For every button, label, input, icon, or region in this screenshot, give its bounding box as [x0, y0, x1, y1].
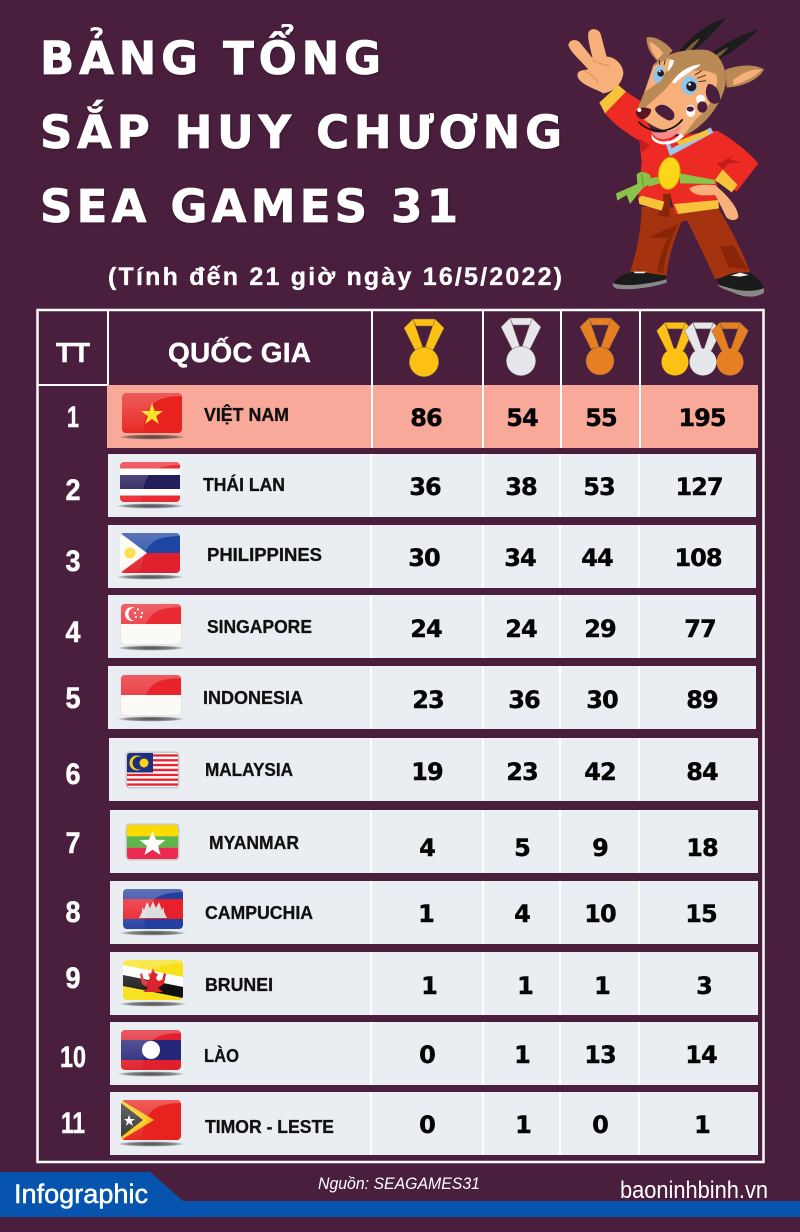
row 7: Myanmar: MYANMAR [209, 832, 299, 853]
row 1: Việt Nam: VIỆT NAM [204, 404, 289, 425]
flag: Brunei [119, 960, 187, 1007]
title: SEA GAMES 31 [40, 180, 458, 233]
flag: Myanmar [126, 824, 180, 860]
flag: Thailand [116, 462, 184, 509]
title: SẮP HUY CHƯƠNG [40, 101, 562, 159]
row 10: Lào: 10 [60, 1041, 86, 1074]
row 8: Campuchia: 15 [685, 900, 717, 928]
row 6: Malaysia [66, 738, 758, 801]
row 6: Malaysia: 42 [584, 758, 616, 786]
row 6: Malaysia: 23 [506, 758, 538, 786]
row 9: Brunei [66, 952, 758, 1015]
title: BẢNG TỔNG [40, 25, 381, 85]
row 5: Indonesia: 23 [412, 686, 444, 714]
row 7: Myanmar: 5 [514, 834, 530, 862]
icon: all medals [657, 322, 748, 376]
row 10: Lào [60, 1022, 758, 1085]
row 2: Thái Lan: 36 [409, 473, 441, 501]
icon: bronze medal [580, 318, 620, 375]
row 4: Singapore: 4 [66, 616, 81, 649]
row 3: Philippines: 34 [504, 544, 536, 572]
row 1: Việt Nam: 54 [506, 404, 538, 432]
row 3: Philippines: 44 [581, 544, 613, 572]
row 2: Thái Lan: THÁI LAN [203, 474, 285, 495]
row 3: Philippines [66, 525, 756, 588]
icon: gold medal [404, 319, 444, 377]
row 2: Thái Lan: 127 [675, 473, 723, 501]
footer banner [0, 1172, 800, 1217]
row 9: Brunei: 3 [696, 972, 712, 1000]
subtitle: date note: (Tính đến 21 giờ ngày 16/5/2022) [108, 263, 562, 291]
row 3: Philippines: 3 [66, 545, 80, 578]
row 8: Campuchia: 8 [66, 896, 80, 929]
row 11: Timor-Leste: 1 [515, 1111, 531, 1139]
row 11: Timor-Leste [61, 1092, 758, 1155]
row 8: Campuchia: 1 [418, 900, 434, 928]
website: baoninhbinh.vn [620, 1177, 768, 1204]
row 6: Malaysia: 19 [411, 758, 443, 786]
flag: Indonesia [117, 674, 185, 722]
footer label: Infographic: Infographic [14, 1179, 148, 1209]
flag: Philippines [116, 533, 184, 580]
row 5: Indonesia: 30 [586, 686, 618, 714]
row 3: Philippines: PHILIPPINES [207, 544, 322, 565]
row 1: Việt Nam: 86 [410, 404, 442, 432]
icon: silver medal [501, 318, 541, 376]
row 1: Việt Nam [67, 385, 758, 448]
row 5: Indonesia: 36 [508, 686, 540, 714]
row 7: Myanmar: 7 [66, 827, 80, 860]
row 5: Indonesia [66, 666, 756, 729]
row 6: Malaysia: 6 [66, 758, 80, 791]
row 4: Singapore: 24 [505, 615, 537, 643]
row 9: Brunei: 9 [66, 962, 80, 995]
row 5: Indonesia: INDONESIA [203, 687, 303, 708]
row 4: Singapore: 24 [410, 615, 442, 643]
row 10: Lào: LÀO [204, 1045, 239, 1066]
row 2: Thái Lan: 38 [505, 473, 537, 501]
header: country: QUỐC GIA [168, 336, 311, 368]
row 7: Myanmar: 9 [592, 834, 608, 862]
row 7: Myanmar [66, 810, 758, 873]
row 3: Philippines: 108 [674, 544, 722, 572]
row 8: Campuchia: 4 [514, 900, 530, 928]
row 11: Timor-Leste: 11 [61, 1107, 85, 1140]
row 10: Lào: 13 [584, 1041, 616, 1069]
row 11: Timor-Leste: 0 [419, 1111, 435, 1139]
flag: Laos [117, 1030, 185, 1077]
row 11: Timor-Leste: 0 [592, 1111, 608, 1139]
flag: Vietnam [118, 393, 186, 440]
row 3: Philippines: 30 [408, 544, 440, 572]
row 8: Campuchia: 10 [584, 900, 616, 928]
flag: Malaysia [126, 752, 180, 788]
row 1: Việt Nam: 195 [678, 404, 726, 432]
row 4: Singapore [66, 595, 756, 658]
row 7: Myanmar: 4 [419, 834, 435, 862]
row 4: Singapore: 29 [584, 615, 616, 643]
row 1: Việt Nam: 1 [67, 401, 79, 434]
row 10: Lào: 0 [419, 1041, 435, 1069]
flag: Singapore [117, 604, 185, 651]
flag: Timor-Leste [117, 1100, 185, 1147]
row 11: Timor-Leste: TIMOR - LESTE [205, 1116, 334, 1137]
row 4: Singapore: 77 [684, 615, 716, 643]
row 10: Lào: 14 [685, 1041, 717, 1069]
row 9: Brunei: 1 [421, 972, 437, 1000]
row 8: Campuchia: CAMPUCHIA [205, 902, 313, 923]
mascot: antelope with medal [568, 18, 764, 297]
row 10: Lào: 1 [514, 1041, 530, 1069]
flag: Cambodia [119, 889, 187, 936]
source note: Nguồn: SEAGAMES31 [318, 1175, 480, 1193]
row 2: Thái Lan: 2 [66, 474, 80, 507]
table frame [38, 310, 764, 1162]
row 4: Singapore: SINGAPORE [207, 616, 312, 637]
row 7: Myanmar: 18 [686, 834, 718, 862]
row 1: Việt Nam: 55 [585, 404, 617, 432]
row 9: Brunei: 1 [594, 972, 610, 1000]
row 11: Timor-Leste: 1 [694, 1111, 710, 1139]
row 2: Thái Lan [66, 454, 756, 517]
row 8: Campuchia [66, 881, 758, 944]
row 9: Brunei: BRUNEI [205, 974, 273, 995]
row 2: Thái Lan: 53 [583, 473, 615, 501]
row 6: Malaysia: MALAYSIA [205, 759, 293, 780]
row 9: Brunei: 1 [517, 972, 533, 1000]
title [40, 25, 562, 233]
table header [38, 310, 748, 448]
row 5: Indonesia: 5 [66, 682, 80, 715]
header: rank: TT [56, 337, 90, 368]
row 5: Indonesia: 89 [686, 686, 718, 714]
row 6: Malaysia: 84 [686, 758, 718, 786]
